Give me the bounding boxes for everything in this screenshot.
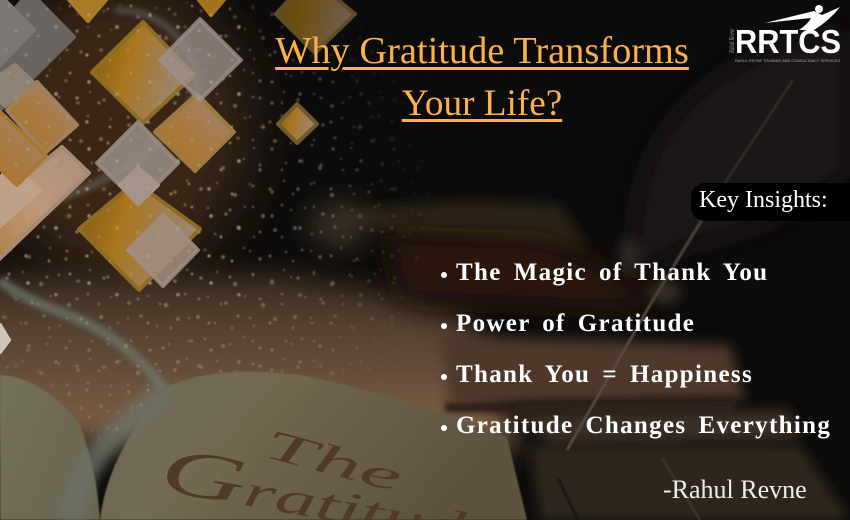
golden spark particles bbox=[2, 2, 422, 439]
bullet dot 2 bbox=[441, 323, 447, 329]
bluish swirl ribbon bbox=[0, 10, 197, 520]
logo wordmark: RRTCS bbox=[735, 23, 841, 60]
author signature: -Rahul Revne bbox=[663, 475, 807, 504]
insight 2: Power of Gratitude bbox=[456, 310, 695, 337]
bullet dot 1 bbox=[441, 272, 447, 278]
key insights pill bbox=[691, 183, 850, 221]
title: Your Life? bbox=[402, 83, 562, 124]
blurred stacked books on desk bbox=[308, 202, 850, 520]
insights list bbox=[441, 259, 831, 439]
key insights pill: Key Insights: bbox=[699, 187, 828, 213]
open gratitude book bbox=[0, 372, 527, 520]
book cover script: The Gratitude bbox=[155, 421, 508, 520]
bullet dot 4 bbox=[441, 425, 447, 431]
feather quill bbox=[567, 30, 850, 450]
logo tagline: RAHUL REVNE TRAINING AND CONSULTANCY SERVICES bbox=[735, 58, 840, 63]
insight 4: Gratitude Changes Everything bbox=[456, 412, 831, 439]
title bbox=[275, 30, 689, 124]
logo: RRTCS bbox=[728, 5, 841, 63]
book cover script: The Gratitude: The bbox=[259, 421, 407, 502]
insight 3: Thank You = Happiness bbox=[456, 361, 753, 388]
sparks over the diamonds bbox=[0, 0, 245, 295]
title: Why Gratitude Transforms bbox=[275, 30, 689, 72]
logo signature: Rahul Revne bbox=[728, 29, 736, 54]
bullet dot 3 bbox=[441, 374, 447, 380]
insight 1: The Magic of Thank You bbox=[456, 259, 768, 286]
brown glow behind the spark swirl bbox=[0, 0, 520, 450]
glass diamonds cluster bbox=[0, 0, 355, 352]
icon: swoosh figure bbox=[765, 5, 840, 30]
